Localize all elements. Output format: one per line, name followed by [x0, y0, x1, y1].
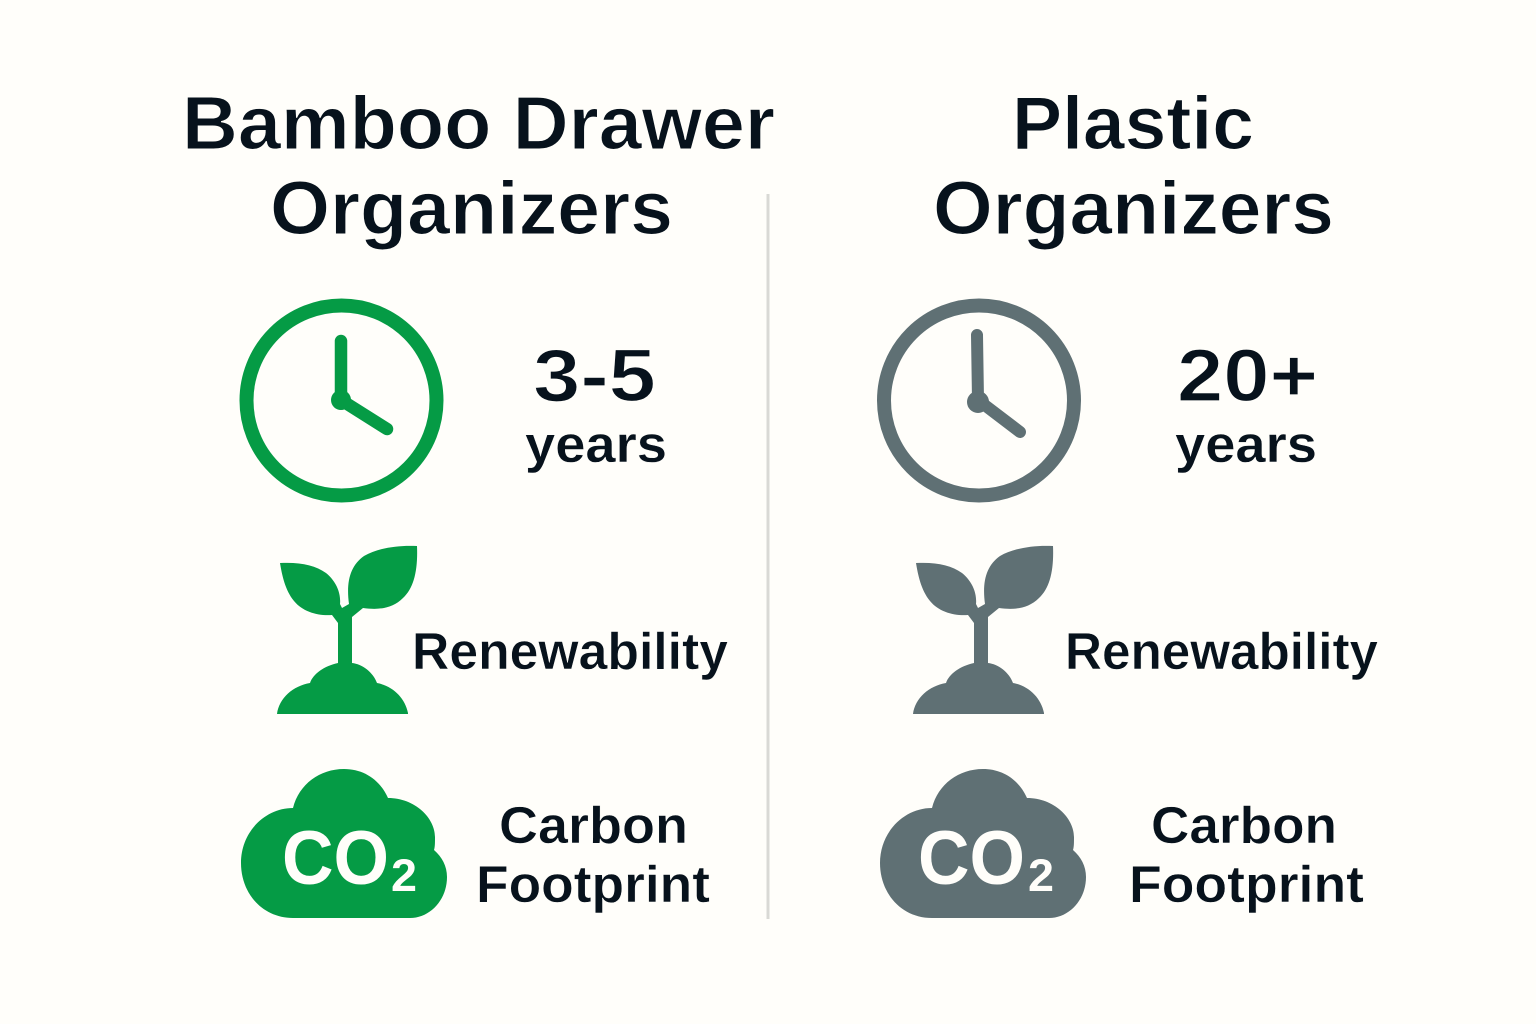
label: Carbon Footprint: Footprint — [1129, 856, 1364, 914]
panel: bamboo drawer organizers — [182, 81, 775, 918]
icon: green clock — [246, 306, 436, 496]
lifespan: 3-5 years: years — [525, 416, 667, 474]
heading: Plastic Organizers — [933, 81, 1334, 250]
icon: green sprout — [277, 546, 417, 714]
label: Carbon Footprint: Carbon — [499, 797, 688, 855]
label: Carbon Footprint: Footprint — [476, 856, 710, 914]
lifespan: 3-5 years: 3-5 — [533, 334, 656, 417]
lifespan: 20+ years — [1175, 334, 1318, 474]
heading: Plastic Organizers: Organizers — [933, 166, 1334, 250]
icon: gray sprout — [913, 546, 1053, 714]
icon: green CO2 cloud: CO — [282, 816, 389, 901]
label: Carbon Footprint — [476, 797, 710, 914]
heading: Bamboo Drawer Organizers: Organizers — [270, 166, 673, 250]
label: Carbon Footprint — [1129, 797, 1364, 914]
icon: gray CO2 cloud — [880, 769, 1086, 918]
lifespan: 20+ years: years — [1175, 416, 1317, 474]
panel: plastic organizers — [880, 81, 1378, 918]
icon: gray CO2 cloud: CO — [918, 816, 1025, 901]
lifespan: 20+ years: 20+ — [1177, 334, 1318, 417]
icon: green CO2 cloud: 2 — [391, 850, 417, 901]
heading: Bamboo Drawer Organizers: Bamboo Drawer — [182, 81, 775, 165]
icon: green CO2 cloud — [241, 769, 447, 918]
lifespan: 3-5 years — [525, 334, 667, 474]
heading: Bamboo Drawer Organizers — [182, 81, 775, 250]
heading: Plastic Organizers: Plastic — [1012, 81, 1254, 165]
icon: gray CO2 cloud: 2 — [1028, 850, 1054, 901]
label: Carbon Footprint: Carbon — [1151, 797, 1337, 855]
label: Renewability: Renewability — [1065, 623, 1378, 681]
label: Renewability: Renewability — [412, 623, 728, 681]
icon: gray clock — [884, 306, 1074, 496]
